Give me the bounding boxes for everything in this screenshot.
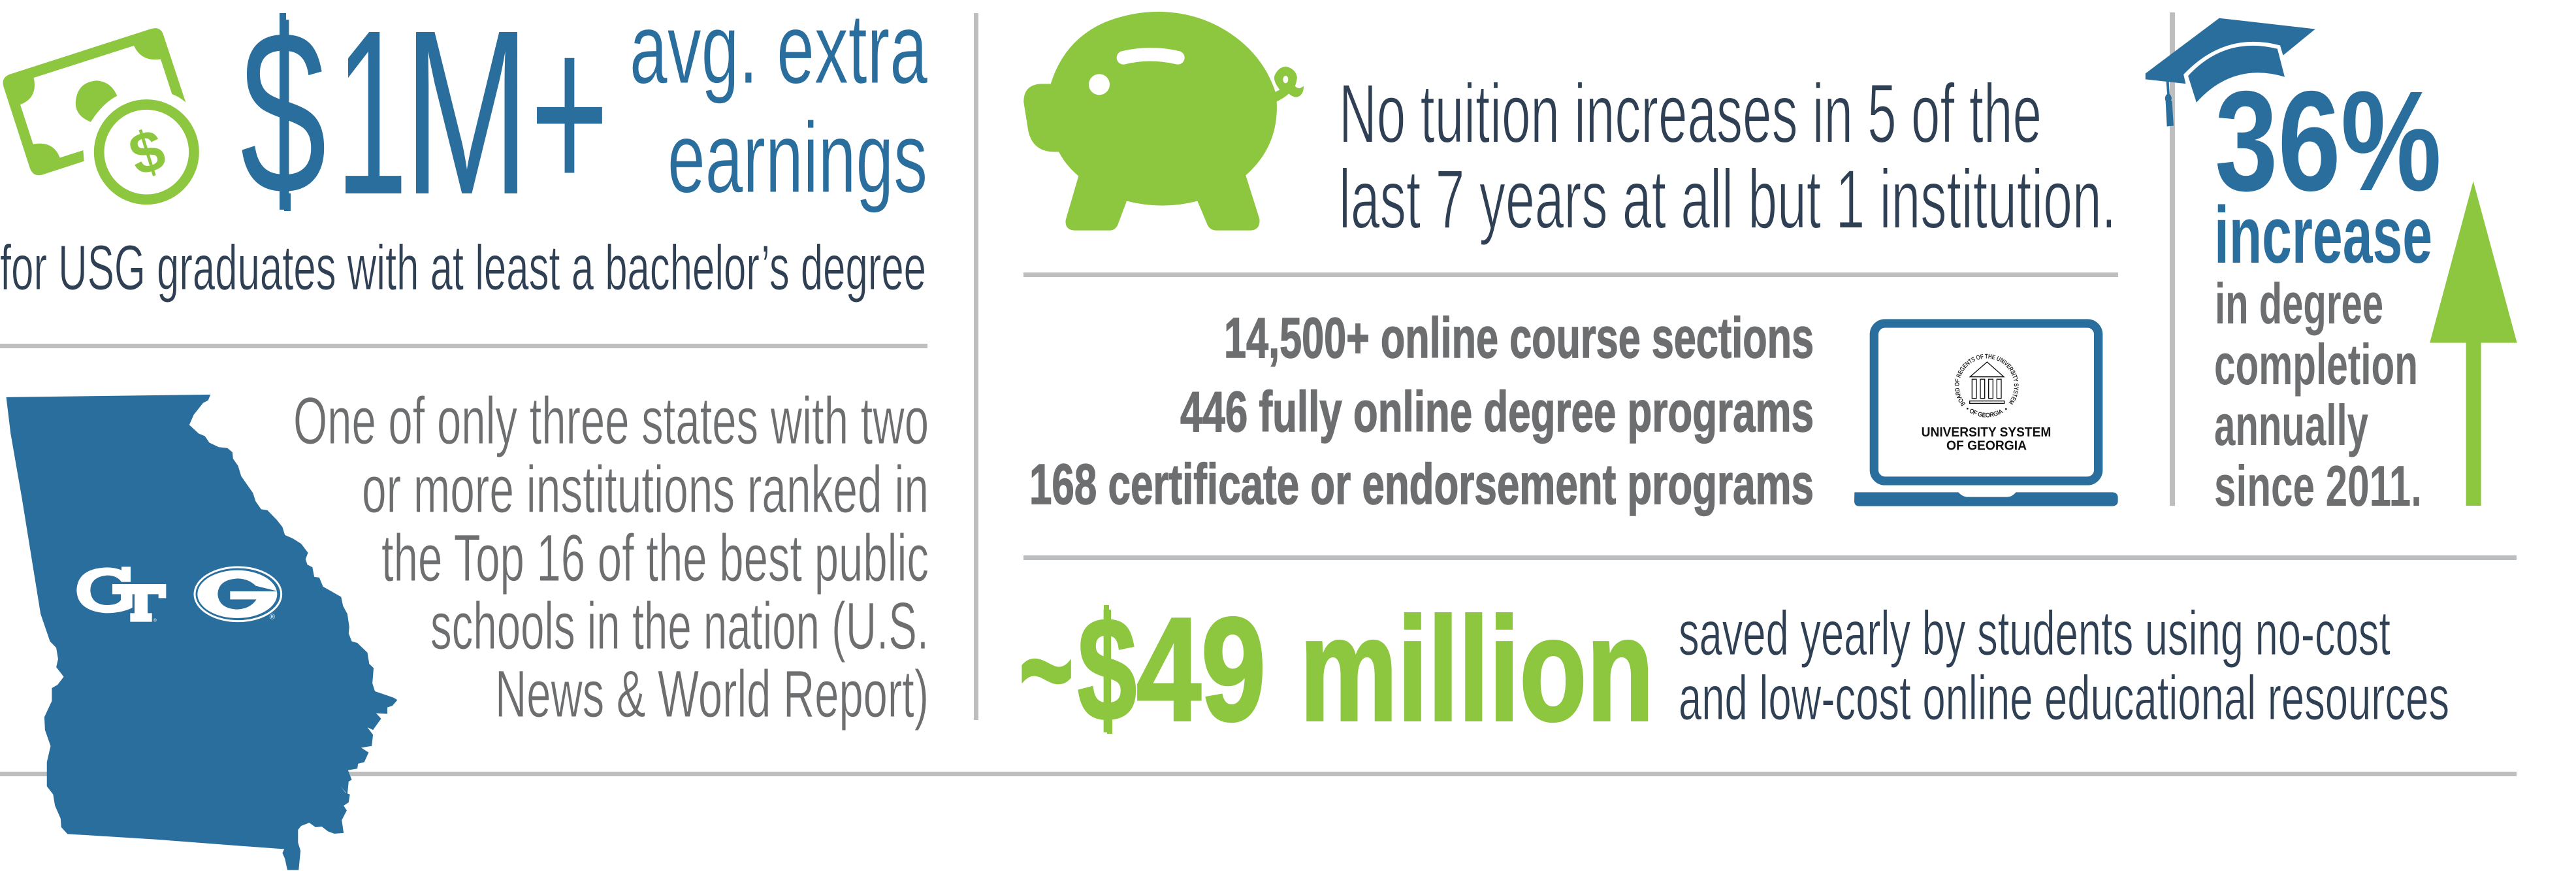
text: no tuition increases: No tuition increases in 5 of the	[1339, 67, 2042, 161]
map: Georgia state	[7, 395, 397, 870]
logo: regents seal: OF GEORGIA	[1970, 409, 2003, 418]
text: no tuition increases	[1339, 67, 2116, 246]
heading: avg. extra earnings	[630, 0, 928, 214]
text: for USG graduates: for USG graduates with at least a bachelor’s degree	[0, 232, 926, 303]
text: top 16 rankings: schools in the nation (U.S.	[430, 589, 929, 663]
panel: earnings	[0, 0, 928, 303]
text: top 16 rankings: the Top 16 of the best public	[381, 521, 929, 595]
list: online statistics	[1029, 306, 1814, 516]
text: in degree completion annually since 2011	[2214, 271, 2422, 518]
list: online statistics: 168 certificate or endorsement programs	[1029, 453, 1814, 516]
icon: piggy bank	[1023, 12, 1304, 231]
logo: Georgia Tech GT	[76, 567, 166, 623]
text: top 16 rankings: News & World Report)	[495, 657, 929, 731]
big number: $1M+	[240, 0, 609, 244]
panel: savings	[1019, 587, 2449, 751]
big number: ~$49 million: ~	[1019, 587, 1074, 751]
text: in degree completion annually since 2011: annually	[2214, 393, 2368, 457]
text: top 16 rankings: or more institutions ranked in	[362, 452, 929, 527]
text: University System of Georgia: UNIVERSITY SYSTEM	[1922, 425, 2051, 440]
arrow: upward green	[2430, 181, 2517, 506]
panel: tuition	[1023, 12, 2116, 246]
icon: laptop with USG logo	[1854, 319, 2118, 506]
icon: graduation cap	[2146, 18, 2315, 127]
logo: University of Georgia G: ®	[270, 613, 276, 621]
text: top 16 rankings: One of only three states with two	[293, 384, 929, 458]
panel: online programs	[1029, 306, 2118, 516]
text: saved yearly	[1679, 599, 2449, 733]
big number: ~$49 million: $	[1078, 587, 1136, 751]
big number: ~$49 million: million	[1300, 587, 1654, 751]
heading: avg. extra earnings: earnings	[668, 102, 927, 214]
text: no tuition increases: last 7 years at all but 1 institution.	[1339, 153, 2116, 246]
panel: degree completion	[2146, 18, 2517, 518]
icon: money bill and coin: $	[122, 117, 172, 189]
panel: Georgia rankings	[7, 384, 929, 870]
logo: Georgia Tech GT: ®	[153, 617, 157, 623]
text: University System of Georgia	[1922, 425, 2051, 453]
big number: 36%: 36%	[2215, 62, 2441, 221]
text: in degree completion annually since 2011: since 2011.	[2214, 453, 2422, 518]
big number: ~$49 million	[1019, 587, 1654, 751]
logo: University of Georgia G	[195, 567, 282, 621]
text: in degree completion annually since 2011: in degree	[2215, 271, 2383, 336]
big number: ~$49 million: 49	[1136, 587, 1266, 751]
text: in degree completion annually since 2011: completion	[2214, 332, 2418, 397]
icon: money bill and coin	[3, 28, 194, 199]
list: online statistics: 14,500+ online course sections	[1224, 306, 1814, 370]
text: University System of Georgia: OF GEORGIA	[1946, 438, 2027, 453]
text: top 16 rankings	[293, 384, 929, 731]
logo: regents seal: BOARD OF REGENTS OF THE UNIVERSITY SYSTEM	[1954, 354, 2019, 406]
list: online statistics: 446 fully online degree programs	[1180, 380, 1814, 444]
heading: increase: increase	[2214, 191, 2432, 280]
